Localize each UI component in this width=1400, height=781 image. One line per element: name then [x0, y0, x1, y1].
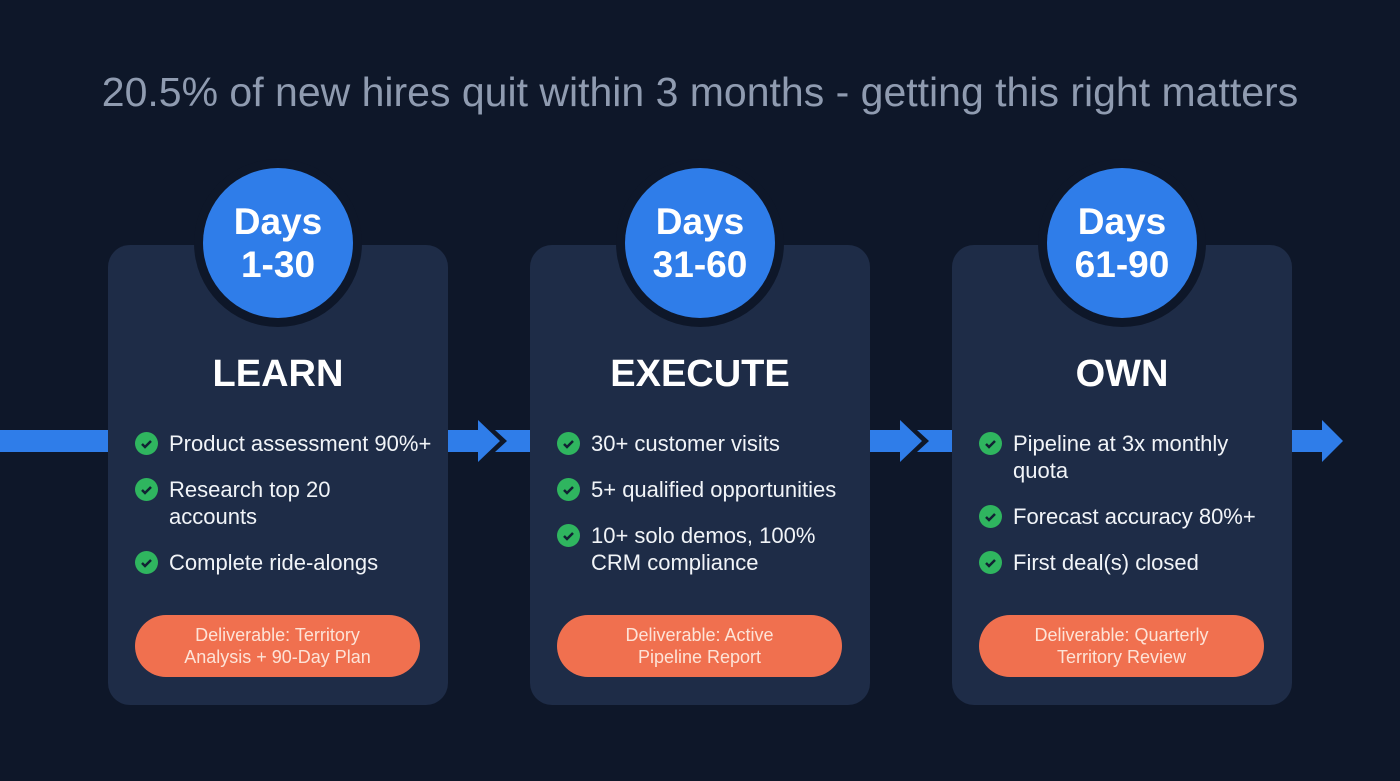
badge: days 1-30: 1-30 — [241, 244, 315, 285]
checklist: execute: CRM compliance — [591, 550, 758, 575]
panel: execute — [530, 245, 870, 705]
deliverable pill: learn — [135, 615, 420, 677]
panel: learn — [108, 245, 448, 705]
badge: days 61-90: 61-90 — [1075, 244, 1169, 285]
checklist: learn: accounts — [169, 504, 257, 529]
checklist: own: First deal(s) closed — [1013, 550, 1199, 575]
badge: days 1-30 — [194, 159, 362, 327]
badge: days 61-90 — [1038, 159, 1206, 327]
badge: days 31-60: Days — [656, 201, 744, 242]
checklist: own: quota — [1013, 458, 1068, 483]
checklist: execute — [557, 431, 836, 575]
checklist: execute: 5+ qualified opportunities — [591, 477, 836, 502]
deliverable pill: execute — [557, 615, 842, 677]
deliverable pill: own: Deliverable: Quarterly — [1034, 625, 1209, 645]
checklist: own — [979, 431, 1256, 575]
heading: learn: LEARN — [213, 353, 343, 395]
checklist: learn: Research top 20 — [169, 477, 330, 502]
deliverable pill: execute: Deliverable: Active — [625, 625, 774, 645]
checklist: learn — [135, 431, 431, 575]
badge: days 31-60 — [616, 159, 784, 327]
deliverable pill: learn: Analysis + 90-Day Plan — [184, 647, 371, 667]
checklist: own: Pipeline at 3x monthly — [1013, 431, 1228, 456]
deliverable pill: own: Territory Review — [1057, 647, 1186, 667]
title: 20.5% of new hires quit within 3 months - getting this right matters — [102, 69, 1298, 115]
checklist: learn: Product assessment 90%+ — [169, 431, 431, 456]
deliverable pill: own — [979, 615, 1264, 677]
deliverable pill: execute: Pipeline Report — [638, 647, 761, 667]
panel: own — [952, 245, 1292, 705]
badge: days 31-60: 31-60 — [653, 244, 747, 285]
deliverable pill: learn: Deliverable: Territory — [195, 625, 360, 645]
checklist: own: Forecast accuracy 80%+ — [1013, 504, 1256, 529]
heading: own: OWN — [1076, 353, 1168, 395]
checklist: learn: Complete ride-alongs — [169, 550, 378, 575]
checklist: execute: 10+ solo demos, 100% — [591, 523, 815, 548]
badge: days 1-30: Days — [234, 201, 322, 242]
badge: days 61-90: Days — [1078, 201, 1166, 242]
checklist: execute: 30+ customer visits — [591, 431, 780, 456]
heading: execute: EXECUTE — [610, 353, 790, 395]
